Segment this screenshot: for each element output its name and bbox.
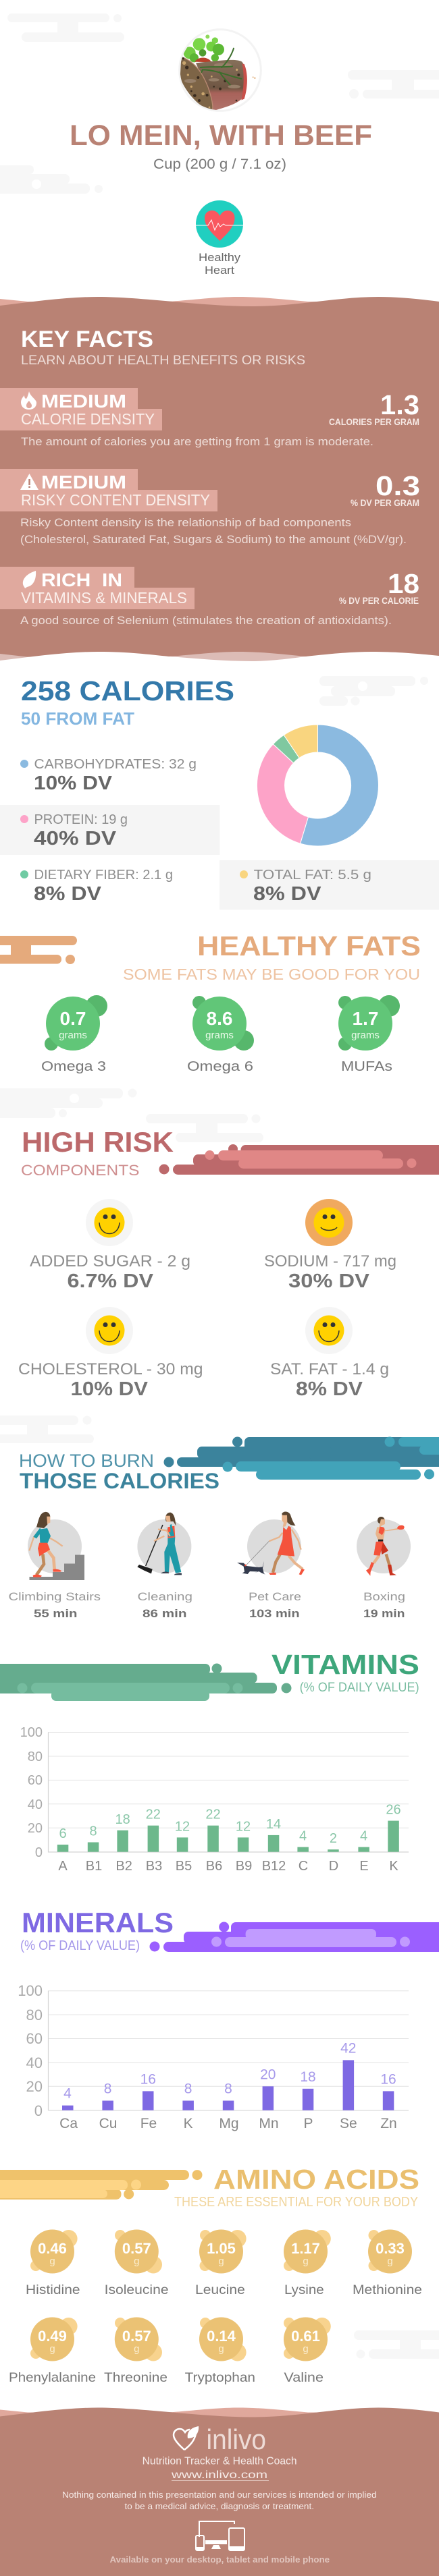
bar chart: vitamins: B1 <box>86 1859 102 1874</box>
bar chart: vitamins: 2 <box>330 1831 337 1846</box>
bar chart: minerals: 40 <box>26 2054 43 2071</box>
amino acid: phenylalanine: g <box>49 2343 55 2355</box>
bar chart: vitamins: B6 <box>206 1859 222 1874</box>
decorative bars: healthy fats <box>0 936 77 964</box>
bar chart: minerals: 20 <box>260 2067 276 2082</box>
activity: pet care: 103 min <box>249 1607 300 1620</box>
amino acid: methionine: 0.33 <box>376 2240 405 2257</box>
activity: pet care: Pet Care <box>249 1590 301 1603</box>
fact: rich in vitamins and minerals <box>0 567 419 627</box>
risk: saturated fat: SAT. FAT - 1.4 g <box>270 1360 389 1378</box>
bar chart: vitamins: 100 <box>20 1725 43 1740</box>
heading: amino acids: AMINO ACIDS <box>213 2164 419 2195</box>
activity: climbing stairs: 55 min <box>34 1607 77 1620</box>
bar chart: minerals: 100 <box>18 1982 43 1999</box>
bar chart: vitamins: 8 <box>89 1824 97 1839</box>
bar chart: vitamins: 0 <box>35 1845 43 1860</box>
subheading: components: COMPONENTS <box>21 1162 140 1179</box>
amino acid: leucine <box>195 2229 247 2297</box>
bar chart: vitamins: B2 <box>115 1859 132 1874</box>
amino acid: lysine: 1.17 <box>291 2240 320 2257</box>
panel: footer <box>0 2407 439 2576</box>
fact: calorie density: 1.3 <box>380 389 419 420</box>
heading: healthy fats: HEALTHY FATS <box>197 930 421 961</box>
heading: those calories: THOSE CALORIES <box>20 1469 220 1493</box>
risk: added sugar <box>30 1199 190 1292</box>
bar chart: vitamins: B5 <box>176 1859 192 1874</box>
fact: rich in vitamins and minerals: 18 <box>388 568 419 599</box>
risk: cholesterol <box>18 1307 203 1400</box>
amino acid: leucine: 1.05 <box>207 2240 236 2257</box>
activity: cleaning <box>137 1513 192 1620</box>
bar chart: minerals: Zn <box>380 2116 397 2131</box>
decorative bars: minerals <box>150 1922 439 1952</box>
amino acid: lysine: g <box>303 2256 309 2267</box>
brand name: inlivo <box>207 2424 266 2455</box>
bar chart: vitamins: 22 <box>205 1808 221 1822</box>
amino acid: lysine: Lysine <box>284 2283 324 2297</box>
amino acid: tryptophan: 0.14 <box>207 2328 236 2345</box>
fact: risky content density: RISKY CONTENT DENSITY <box>21 491 210 509</box>
legend: protein <box>0 805 220 855</box>
activity: boxing <box>357 1517 411 1620</box>
risk: cholesterol: 10% DV <box>70 1378 149 1400</box>
subheading: key facts: LEARN ABOUT HEALTH BENEFITS OR RISKS <box>21 353 305 368</box>
activity: boxing: Boxing <box>363 1590 405 1603</box>
heading: minerals: MINERALS <box>22 1907 174 1938</box>
fact: risky content density: 0.3 <box>376 470 420 501</box>
bar chart: minerals: 0 <box>34 2102 43 2119</box>
fact: risky content density: (Cholesterol, Saturated Fat, Sugars & Sodium) to the amount (%DV/gr). <box>20 533 407 546</box>
bar chart: vitamins: A <box>58 1859 68 1874</box>
amino acid: methionine <box>353 2229 422 2297</box>
heart label <box>199 251 241 277</box>
amino acid: threonine: 0.57 <box>122 2328 151 2345</box>
fat: omega 3: grams <box>59 1030 87 1041</box>
risk: saturated fat: 8% DV <box>296 1378 363 1400</box>
bar chart: minerals: 60 <box>26 2030 43 2047</box>
risk: added sugar: 6.7% DV <box>68 1270 154 1292</box>
bar chart: vitamins: 80 <box>28 1749 43 1764</box>
background clouds: high risk <box>0 1088 263 1142</box>
availability note: Available on your desktop, tablet and mobile phone <box>109 2554 330 2565</box>
bar chart: vitamins: 60 <box>28 1773 43 1788</box>
risk: sodium <box>264 1199 396 1292</box>
heading: how to burn: HOW TO BURN <box>19 1451 154 1471</box>
fat: omega 6: Omega 6 <box>187 1059 253 1074</box>
disclaimer: Nothing contained in this presentation and our services is intended or implied <box>62 2490 377 2500</box>
tagline: Nutrition Tracker & Health Coach <box>143 2456 297 2467</box>
amino acid: threonine <box>104 2317 167 2385</box>
disclaimer <box>62 2490 377 2511</box>
fact: calorie density <box>0 388 419 448</box>
legend: dietary fiber: 8% DV <box>34 883 102 905</box>
legend: protein: PROTEIN: 19 g <box>34 812 128 827</box>
bar chart: minerals: Cu <box>99 2116 117 2131</box>
subheading: healthy fats: SOME FATS MAY BE GOOD FOR YOU <box>123 965 420 983</box>
bar chart: vitamins: 4 <box>299 1829 307 1844</box>
amino acid: histidine: g <box>49 2256 55 2267</box>
activity: climbing stairs <box>8 1512 101 1620</box>
heading: calories: 258 CALORIES <box>21 675 234 706</box>
amino acid: histidine: Histidine <box>26 2283 80 2297</box>
title: LO MEIN, WITH BEEF <box>70 119 372 152</box>
risk: cholesterol: CHOLESTEROL - 30 mg <box>18 1360 203 1378</box>
amino acid: methionine: g <box>387 2256 393 2267</box>
fat: MUFAs <box>338 995 400 1074</box>
fact: calorie density: CALORIES PER GRAM <box>329 416 419 427</box>
subheading: minerals: (% OF DAILY VALUE) <box>20 1938 140 1953</box>
bar chart: vitamins: 18 <box>115 1812 130 1827</box>
decorative bars: amino acids <box>0 2170 203 2200</box>
heading: key facts: KEY FACTS <box>21 327 153 352</box>
bar chart: vitamins: 6 <box>59 1826 67 1841</box>
bar chart: minerals: Fe <box>140 2116 157 2131</box>
risk: added sugar: ADDED SUGAR - 2 g <box>30 1252 190 1270</box>
fat: MUFAs: MUFAs <box>341 1059 392 1074</box>
amino acid: valine: Valine <box>284 2371 324 2385</box>
fat: omega 3: 0.7 <box>60 1008 86 1029</box>
fat: omega 6: grams <box>205 1030 234 1041</box>
amino acid: tryptophan: g <box>218 2343 224 2355</box>
bar chart: minerals: 16 <box>140 2071 156 2087</box>
fat: omega 6: 8.6 <box>207 1008 232 1029</box>
risk: saturated fat <box>270 1307 389 1400</box>
decorative bars: vitamins <box>0 1664 292 1701</box>
background cloud: amino acids <box>354 2330 439 2359</box>
bar chart: minerals: 18 <box>300 2069 316 2085</box>
amino acid: leucine: g <box>218 2256 224 2267</box>
bar chart: vitamins: 26 <box>386 1803 401 1818</box>
bar chart: vitamins: 20 <box>28 1821 43 1836</box>
fact: rich in vitamins and minerals: RICH IN <box>41 569 122 590</box>
legend: carbohydrates <box>20 757 197 794</box>
icon: healthy heart <box>196 200 243 248</box>
amino acid: threonine: g <box>134 2343 139 2355</box>
bar chart: vitamins <box>20 1725 409 1874</box>
amino acid: phenylalanine: 0.49 <box>38 2328 67 2345</box>
fact: risky content density: MEDIUM <box>41 472 126 493</box>
fat: omega 3: Omega 3 <box>41 1059 106 1074</box>
background clouds: header <box>0 13 439 194</box>
amino acid: phenylalanine: Phenylalanine <box>9 2371 96 2385</box>
decorative bars: high risk <box>159 1144 439 1175</box>
amino acid: phenylalanine <box>9 2317 96 2385</box>
icon: devices <box>196 2521 244 2550</box>
legend: total fat: 8% DV <box>253 883 321 905</box>
amino acid: valine: g <box>303 2343 309 2355</box>
bar chart: minerals: P <box>303 2116 313 2131</box>
bar chart: minerals: 4 <box>63 2086 72 2102</box>
fat: MUFAs: grams <box>351 1030 380 1041</box>
amino acid: isoleucine: Isoleucine <box>105 2283 169 2297</box>
fact: calorie density: The amount of calories you are getting from 1 gram is moderate. <box>21 435 373 448</box>
legend: carbohydrates: 10% DV <box>34 773 113 794</box>
bar chart: vitamins: 22 <box>146 1808 161 1822</box>
fat: omega 6 <box>187 996 254 1074</box>
bar chart: minerals <box>18 1982 409 2131</box>
bar chart: vitamins: C <box>299 1859 308 1874</box>
fact: rich in vitamins and minerals: % DV PER CALORIE <box>339 595 419 606</box>
activity: cleaning: 86 min <box>143 1607 186 1620</box>
fat: omega 3 <box>41 995 107 1074</box>
legend: protein: 40% DV <box>34 828 117 849</box>
bar chart: vitamins: 40 <box>28 1797 43 1812</box>
website link: www.inlivo.com <box>171 2469 267 2481</box>
bar chart: minerals: Se <box>340 2116 357 2131</box>
amino acid: valine <box>284 2317 331 2385</box>
heading: vitamins: VITAMINS <box>272 1649 419 1680</box>
activity: cleaning: Cleaning <box>138 1590 192 1603</box>
fact: risky content density: Risky Content density is the relationship of bad components <box>20 516 351 529</box>
bar chart: minerals: Mn <box>259 2116 279 2131</box>
bar chart: vitamins: B9 <box>236 1859 252 1874</box>
bar chart: vitamins: 14 <box>266 1817 281 1832</box>
legend: carbohydrates: CARBOHYDRATES: 32 g <box>34 757 197 772</box>
legend: total fat <box>220 860 439 909</box>
subheading: vitamins: (% OF DAILY VALUE) <box>300 1681 419 1695</box>
amino acid: histidine <box>26 2229 80 2297</box>
amino acid: valine: 0.61 <box>291 2328 320 2345</box>
chart: macronutrient donut <box>257 725 378 846</box>
icon: inlivo logo <box>174 2426 199 2450</box>
bar chart: vitamins: 12 <box>175 1819 190 1834</box>
legend: dietary fiber <box>20 868 173 905</box>
amino acid: lysine <box>284 2229 331 2297</box>
background cloud: burn <box>0 1416 94 1443</box>
bar chart: vitamins: E <box>359 1859 369 1874</box>
amino acid: tryptophan: Tryptophan <box>185 2371 255 2385</box>
legend: total fat: TOTAL FAT: 5.5 g <box>254 868 371 883</box>
heading: high risk: HIGH RISK <box>22 1126 174 1158</box>
amino acid: tryptophan <box>185 2317 255 2385</box>
bar chart: minerals: 8 <box>184 2081 192 2097</box>
fact: rich in vitamins and minerals: VITAMINS & MINERALS <box>21 589 187 607</box>
subheading: calories from fat: 50 FROM FAT <box>21 708 134 729</box>
bar chart: minerals: 8 <box>224 2081 232 2097</box>
fact: rich in vitamins and minerals: A good source of Selenium (stimulates the creation of antioxidants). <box>20 614 392 627</box>
bar chart: vitamins: 12 <box>236 1819 251 1834</box>
serving size: Cup (200 g / 7.1 oz) <box>153 157 286 172</box>
bar chart: minerals: Mg <box>219 2116 239 2131</box>
bar chart: minerals: 16 <box>380 2071 396 2087</box>
fact: calorie density: CALORIE DENSITY <box>21 410 155 428</box>
decorative bars: burn <box>163 1437 439 1480</box>
bar chart: minerals: K <box>184 2116 193 2131</box>
fact: risky content density <box>0 469 420 546</box>
subheading: amino acids: THESE ARE ESSENTIAL FOR YOUR BODY <box>174 2195 418 2210</box>
amino acid: leucine: Leucine <box>195 2283 245 2297</box>
amino acid: methionine: Methionine <box>353 2283 422 2297</box>
background cloud: calories <box>319 676 428 706</box>
legend: dietary fiber: DIETARY FIBER: 2.1 g <box>34 868 173 883</box>
amino acid: isoleucine: g <box>134 2256 139 2267</box>
fact: calorie density: MEDIUM <box>41 391 126 412</box>
amino acid: histidine: 0.46 <box>38 2240 67 2257</box>
amino acid: isoleucine <box>105 2229 169 2297</box>
activity: boxing: 19 min <box>363 1607 405 1620</box>
bar chart: vitamins: K <box>389 1859 398 1874</box>
activity: climbing stairs: Climbing Stairs <box>8 1590 101 1603</box>
bar chart: vitamins: D <box>329 1859 338 1874</box>
bar chart: minerals: 8 <box>104 2081 111 2097</box>
fact: risky content density: % DV PER GRAM <box>351 497 419 508</box>
bar chart: vitamins: 4 <box>360 1829 367 1844</box>
panel: key facts <box>0 297 439 668</box>
food photo: beef <box>180 30 261 111</box>
bar chart: minerals: Ca <box>59 2116 78 2131</box>
bar chart: minerals: 80 <box>26 2007 43 2023</box>
fat: MUFAs: 1.7 <box>353 1008 378 1029</box>
disclaimer: to be a medical advice, diagnosis or treatment. <box>124 2501 314 2511</box>
risk: sodium: 30% DV <box>288 1270 370 1292</box>
bar chart: vitamins: B12 <box>262 1859 286 1874</box>
amino acid: threonine: Threonine <box>104 2371 167 2385</box>
bar chart: minerals: 20 <box>26 2078 43 2095</box>
heart label: Healthy <box>199 251 241 264</box>
heart label: Heart <box>205 264 234 277</box>
bar chart: minerals: 42 <box>340 2040 356 2056</box>
bar chart: vitamins: B3 <box>146 1859 162 1874</box>
risk: sodium: SODIUM - 717 mg <box>264 1252 396 1270</box>
amino acid: isoleucine: 0.57 <box>122 2240 151 2257</box>
activity: pet care <box>237 1511 305 1620</box>
